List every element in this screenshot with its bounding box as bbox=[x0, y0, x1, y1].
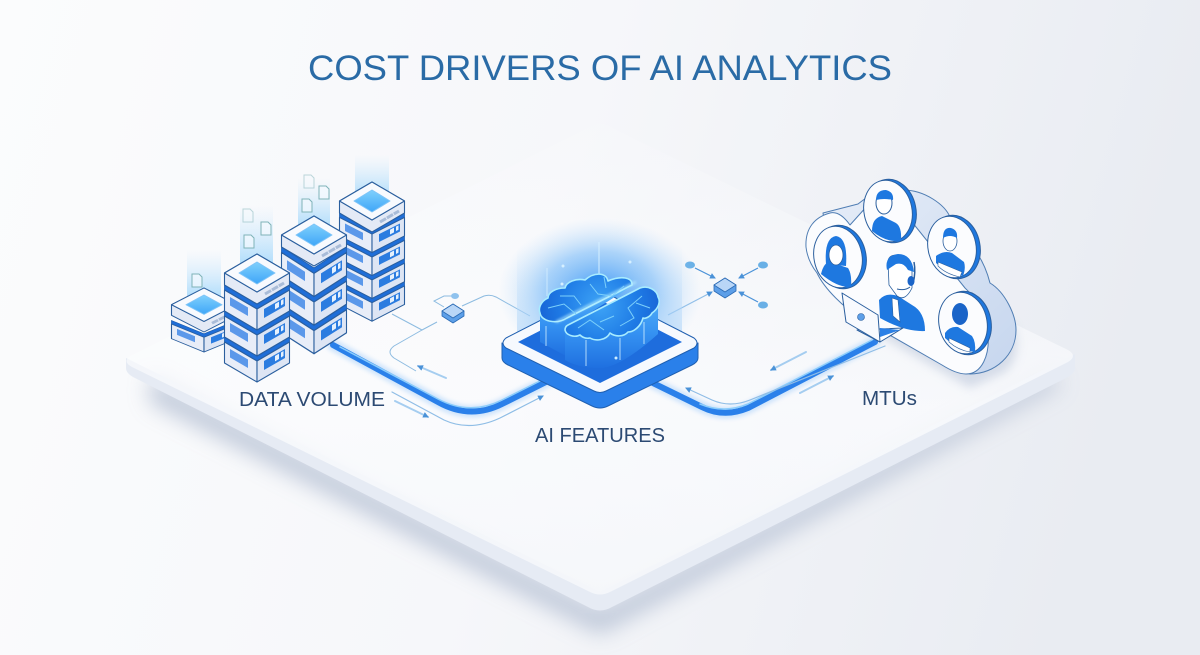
icon: small chip left bbox=[442, 293, 464, 323]
server stack 3 bbox=[282, 216, 346, 354]
user avatar lower right bbox=[933, 287, 997, 359]
connector: MTU pipe to brain bbox=[653, 340, 885, 413]
brain glow sparks bbox=[546, 242, 632, 296]
brain left hemisphere bbox=[539, 274, 632, 322]
label: MTUs: MTUs bbox=[862, 388, 917, 410]
icon: laptop bbox=[842, 293, 903, 342]
brain centre seam glow bbox=[556, 282, 636, 322]
cloud front face bbox=[806, 205, 988, 374]
brain extrusion bbox=[540, 286, 658, 368]
server stack 1 bbox=[172, 288, 236, 352]
connector: thin network lines bbox=[390, 295, 530, 371]
user avatar left bbox=[808, 221, 872, 293]
brain base plate bbox=[502, 292, 698, 408]
user avatar top bbox=[858, 175, 922, 247]
brain right hemisphere bbox=[565, 287, 659, 340]
user agent with headset bbox=[879, 254, 925, 331]
label: AI features: AI FEATURES bbox=[535, 425, 665, 447]
title: COST DRIVERS OF AI ANALYTICS bbox=[308, 49, 892, 88]
icon: AI brain on platform bbox=[498, 218, 702, 408]
server stack 4 bbox=[340, 182, 404, 321]
icon: cloud of users bbox=[806, 175, 1017, 388]
panel: isometric platform bbox=[126, 124, 1075, 634]
icon: data servers bbox=[172, 155, 404, 382]
icon: AI chip network right bbox=[668, 262, 768, 315]
connector: data pipe to brain bbox=[333, 345, 548, 426]
user avatar right bbox=[922, 211, 986, 283]
beams and documents bbox=[187, 155, 389, 298]
server stack 2 bbox=[224, 254, 290, 382]
brain circuit traces bbox=[548, 277, 650, 330]
label: data volume: DATA VOLUME bbox=[239, 389, 385, 411]
cloud back extrusion bbox=[823, 190, 1016, 374]
